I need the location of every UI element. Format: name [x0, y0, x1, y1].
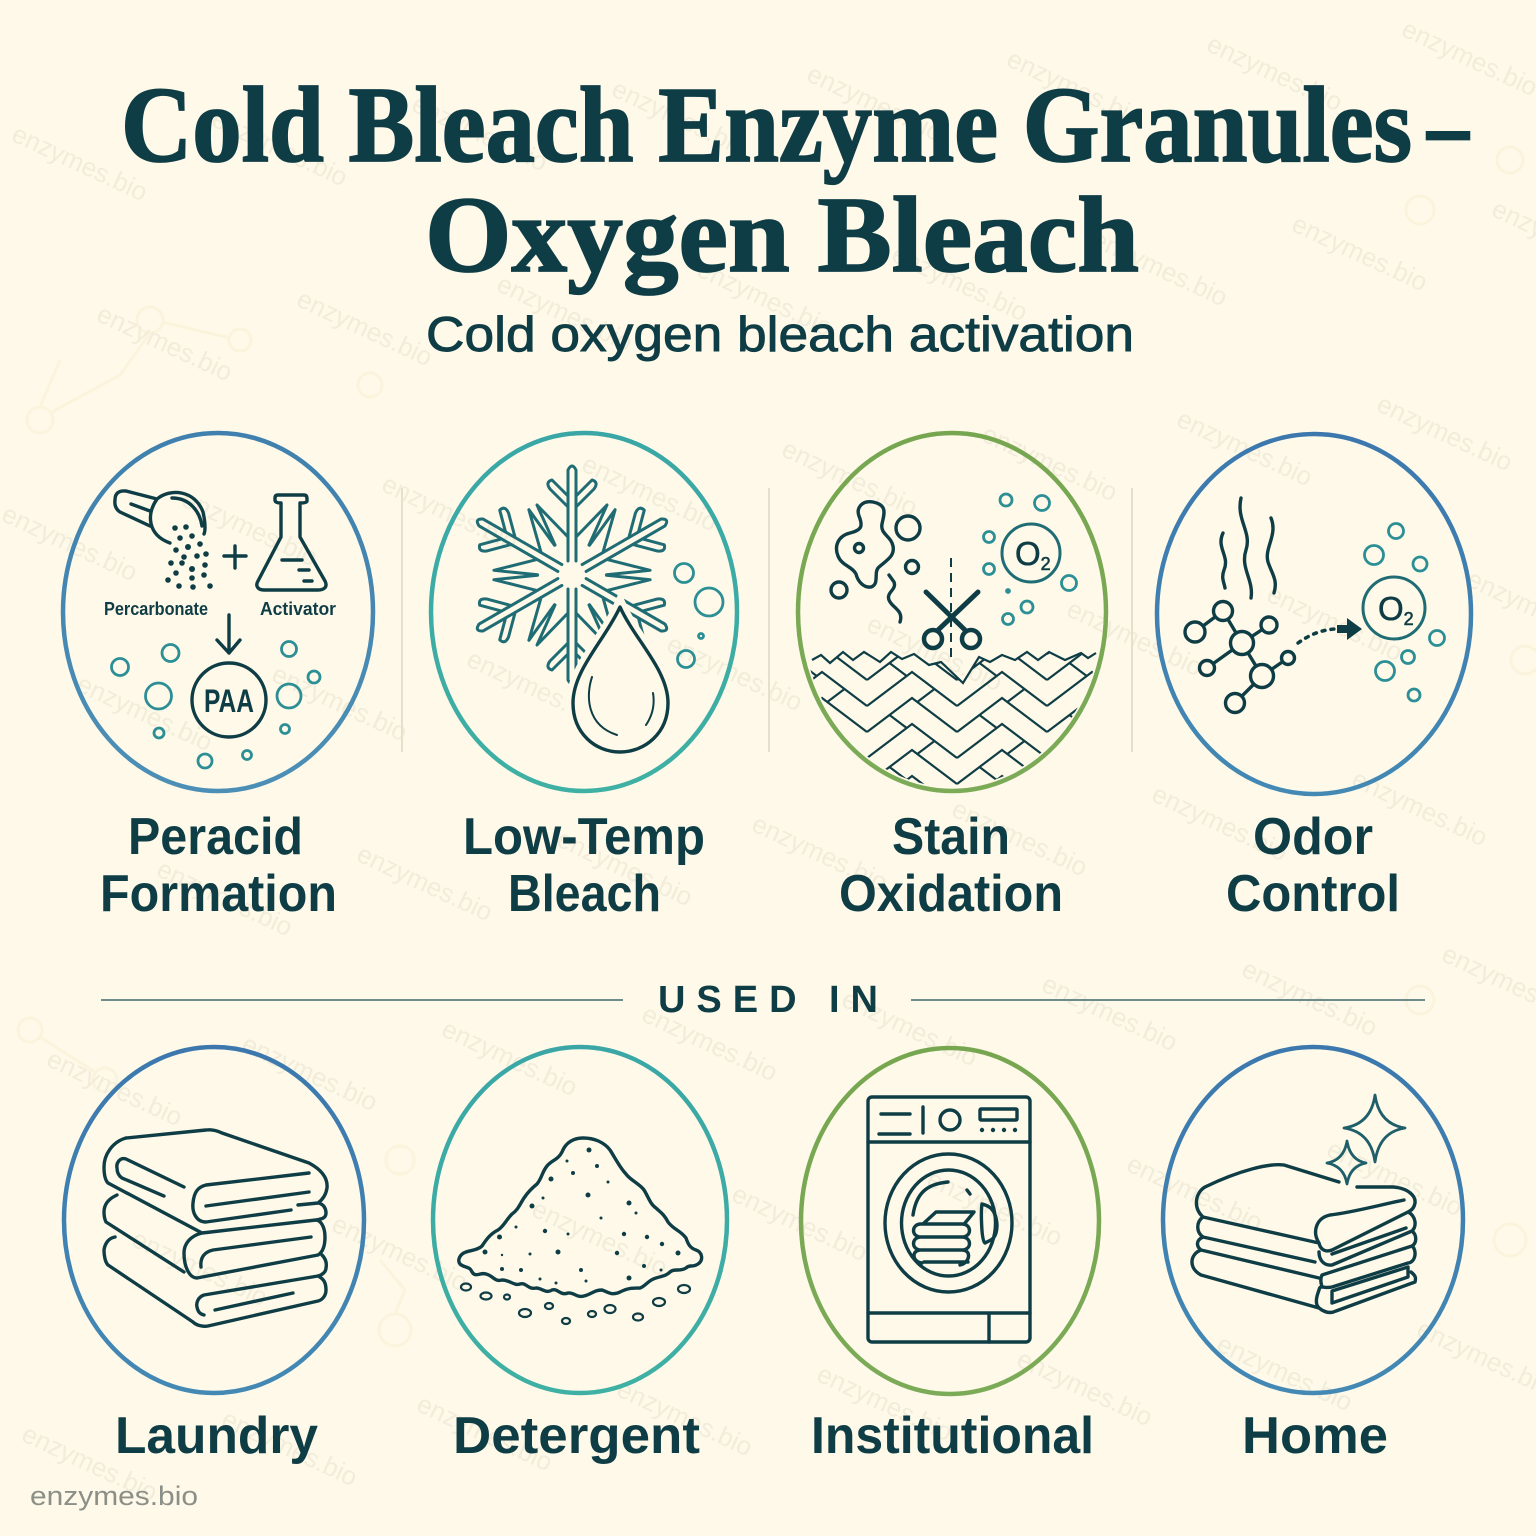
watermark pattern: enzymes.bio	[637, 998, 782, 1087]
label: stain oxidation: Oxidation	[839, 865, 1063, 923]
watermark pattern: enzymes.bio	[977, 418, 1122, 507]
watermark pattern: enzymes.bio	[0, 498, 142, 587]
icon: odor waves	[1221, 498, 1275, 598]
watermark pattern: enzymes.bio	[407, 88, 552, 177]
plus sign	[224, 546, 246, 568]
icon: oxygen O2: 2	[1041, 554, 1051, 574]
label: percarbonate: Percarbonate	[104, 599, 208, 619]
watermark pattern: enzymes.bio	[1372, 388, 1517, 477]
watermark pattern: enzymes.bio	[692, 253, 837, 342]
watermark pattern: enzymes.bio	[352, 838, 497, 927]
label: laundry: Laundry	[115, 1407, 318, 1465]
bubbles	[674, 564, 723, 668]
bubbles	[984, 494, 1076, 624]
watermark pattern: enzymes.bio	[217, 1403, 362, 1492]
icon: oxygen O2	[1363, 577, 1425, 639]
icon: fabric weave	[810, 650, 1096, 785]
label: odor control: Control	[1226, 865, 1400, 923]
panel: odor control	[1157, 434, 1471, 794]
icon: powder pile	[459, 1138, 702, 1324]
watermark pattern: enzymes.bio	[492, 268, 637, 357]
icon: stacked towels	[104, 1130, 327, 1326]
watermark pattern: enzymes.bio	[1322, 1133, 1467, 1222]
watermark pattern: enzymes.bio	[577, 448, 722, 537]
watermark pattern: enzymes.bio	[837, 983, 982, 1072]
label: odor control	[1226, 808, 1400, 923]
panel: low-temp bleach	[431, 433, 737, 791]
watermark pattern: enzymes.bio	[267, 658, 412, 747]
icon: odor molecule	[1185, 602, 1294, 712]
title	[121, 66, 1470, 295]
watermark pattern: enzymes.bio	[862, 608, 1007, 697]
watermark pattern: enzymes.bio	[1087, 223, 1232, 312]
watermark pattern: enzymes.bio	[7, 118, 152, 207]
label: peracid formation: Peracid	[128, 808, 303, 866]
label: home: Home	[1242, 1407, 1388, 1465]
label: institutional: Institutional	[811, 1407, 1094, 1465]
watermark pattern: enzymes.bio	[802, 58, 947, 147]
watermark pattern: enzymes.bio	[1262, 578, 1407, 667]
watermark pattern: enzymes.bio	[412, 1388, 557, 1477]
label: low-temp bleach: Bleach	[508, 865, 661, 923]
icon: snowflake	[460, 466, 684, 684]
panel: detergent	[433, 1047, 727, 1393]
icon: percarbonate granules	[165, 524, 213, 590]
watermark pattern: enzymes.bio	[747, 808, 892, 897]
title: Cold Bleach Enzyme Granules	[121, 66, 1412, 185]
watermark pattern: enzymes.bio	[777, 433, 922, 522]
watermark pattern: enzymes.bio	[922, 1163, 1067, 1252]
arrow: dotted to oxygen	[1298, 618, 1362, 643]
watermark pattern: enzymes.bio	[292, 283, 437, 372]
PAA molecule	[192, 663, 266, 737]
icon: oxygen O2: O	[1378, 590, 1404, 627]
arrow: down to PAA	[217, 615, 240, 653]
watermark pattern: enzymes.bio	[1002, 43, 1147, 132]
watermark pattern: enzymes.bio	[527, 1193, 672, 1282]
watermark pattern: enzymes.bio	[1147, 778, 1292, 867]
panel: laundry	[64, 1047, 364, 1393]
panel: home	[1163, 1047, 1463, 1393]
label: low-temp bleach: Low-Temp	[463, 808, 705, 866]
icon: oxygen O2	[1002, 524, 1060, 582]
watermark pattern: enzymes.bio	[947, 793, 1092, 882]
icon: water drop	[573, 607, 668, 752]
icon: folded towels	[1192, 1165, 1416, 1312]
label: odor control: Odor	[1253, 808, 1373, 866]
panel: institutional	[801, 1048, 1099, 1394]
watermark pattern: enzymes.bio	[437, 1013, 582, 1102]
watermark pattern: enzymes.bio	[1237, 953, 1382, 1042]
panel: stain oxidation	[790, 433, 1120, 800]
watermark pattern: enzymes.bio	[552, 823, 697, 912]
icon: oxygen O2: O	[1015, 535, 1041, 572]
icon: stain blob	[831, 502, 920, 622]
footer brand: enzymes.bio	[30, 1481, 198, 1511]
watermark pattern: enzymes.bio	[327, 1208, 472, 1297]
title: –	[1426, 66, 1470, 185]
icon: washing machine	[868, 1097, 1030, 1342]
label: stain oxidation	[839, 808, 1063, 923]
icon: sparkles	[1327, 1095, 1405, 1184]
watermark pattern: enzymes.bio	[887, 238, 1032, 327]
PAA molecule: PAA	[204, 683, 254, 719]
label: activator: Activator	[260, 599, 336, 619]
title: Oxygen Bleach	[425, 176, 1139, 295]
panel: peracid formation	[63, 433, 373, 791]
watermark pattern: enzymes.bio	[1212, 1328, 1357, 1417]
section divider: used in: USED IN	[658, 979, 878, 1021]
icon: oxygen O2: 2	[1404, 609, 1414, 629]
watermark pattern: enzymes.bio	[207, 103, 352, 192]
label: low-temp bleach	[463, 808, 705, 923]
watermark pattern: enzymes.bio	[727, 1178, 872, 1267]
watermark pattern: enzymes.bio	[377, 468, 522, 557]
watermark pattern: enzymes.bio	[812, 1358, 957, 1447]
watermark pattern: enzymes.bio	[1062, 593, 1207, 682]
icon: scoop	[115, 491, 205, 543]
label: peracid formation	[100, 808, 337, 923]
watermark pattern: enzymes.bio	[127, 1223, 272, 1312]
watermark pattern: enzymes.bio	[1122, 1148, 1267, 1237]
bubbles	[1364, 524, 1444, 701]
label: stain oxidation: Stain	[892, 808, 1010, 866]
watermark pattern: enzymes.bio	[462, 643, 607, 732]
subtitle: Cold oxygen bleach activation	[426, 308, 1134, 362]
watermark pattern: enzymes.bio	[92, 298, 237, 387]
label: detergent: Detergent	[453, 1407, 700, 1465]
dashed cut line	[950, 558, 952, 662]
watermark pattern: enzymes.bio	[72, 668, 217, 757]
watermark pattern: enzymes.bio	[1202, 28, 1347, 117]
icon: flask	[257, 495, 326, 590]
watermark pattern: enzymes.bio	[1172, 403, 1317, 492]
watermark pattern: enzymes.bio	[662, 628, 807, 717]
watermark pattern: enzymes.bio	[1287, 208, 1432, 297]
watermark pattern: enzymes.bio	[607, 73, 752, 162]
watermark pattern: enzymes.bio	[237, 1028, 382, 1117]
watermark pattern: enzymes.bio	[17, 1418, 162, 1507]
watermark pattern: enzymes.bio	[1012, 1343, 1157, 1432]
watermark pattern: enzymes.bio	[42, 1043, 187, 1132]
watermark pattern: enzymes.bio	[177, 483, 322, 572]
watermark pattern: enzymes.bio	[612, 1373, 757, 1462]
icon: scissors	[924, 592, 980, 648]
bubbles	[112, 642, 320, 768]
watermark pattern: enzymes.bio	[1347, 763, 1492, 852]
label: peracid formation: Formation	[100, 865, 337, 923]
watermark pattern: enzymes.bio	[152, 853, 297, 942]
watermark pattern: enzymes.bio	[1037, 968, 1182, 1057]
